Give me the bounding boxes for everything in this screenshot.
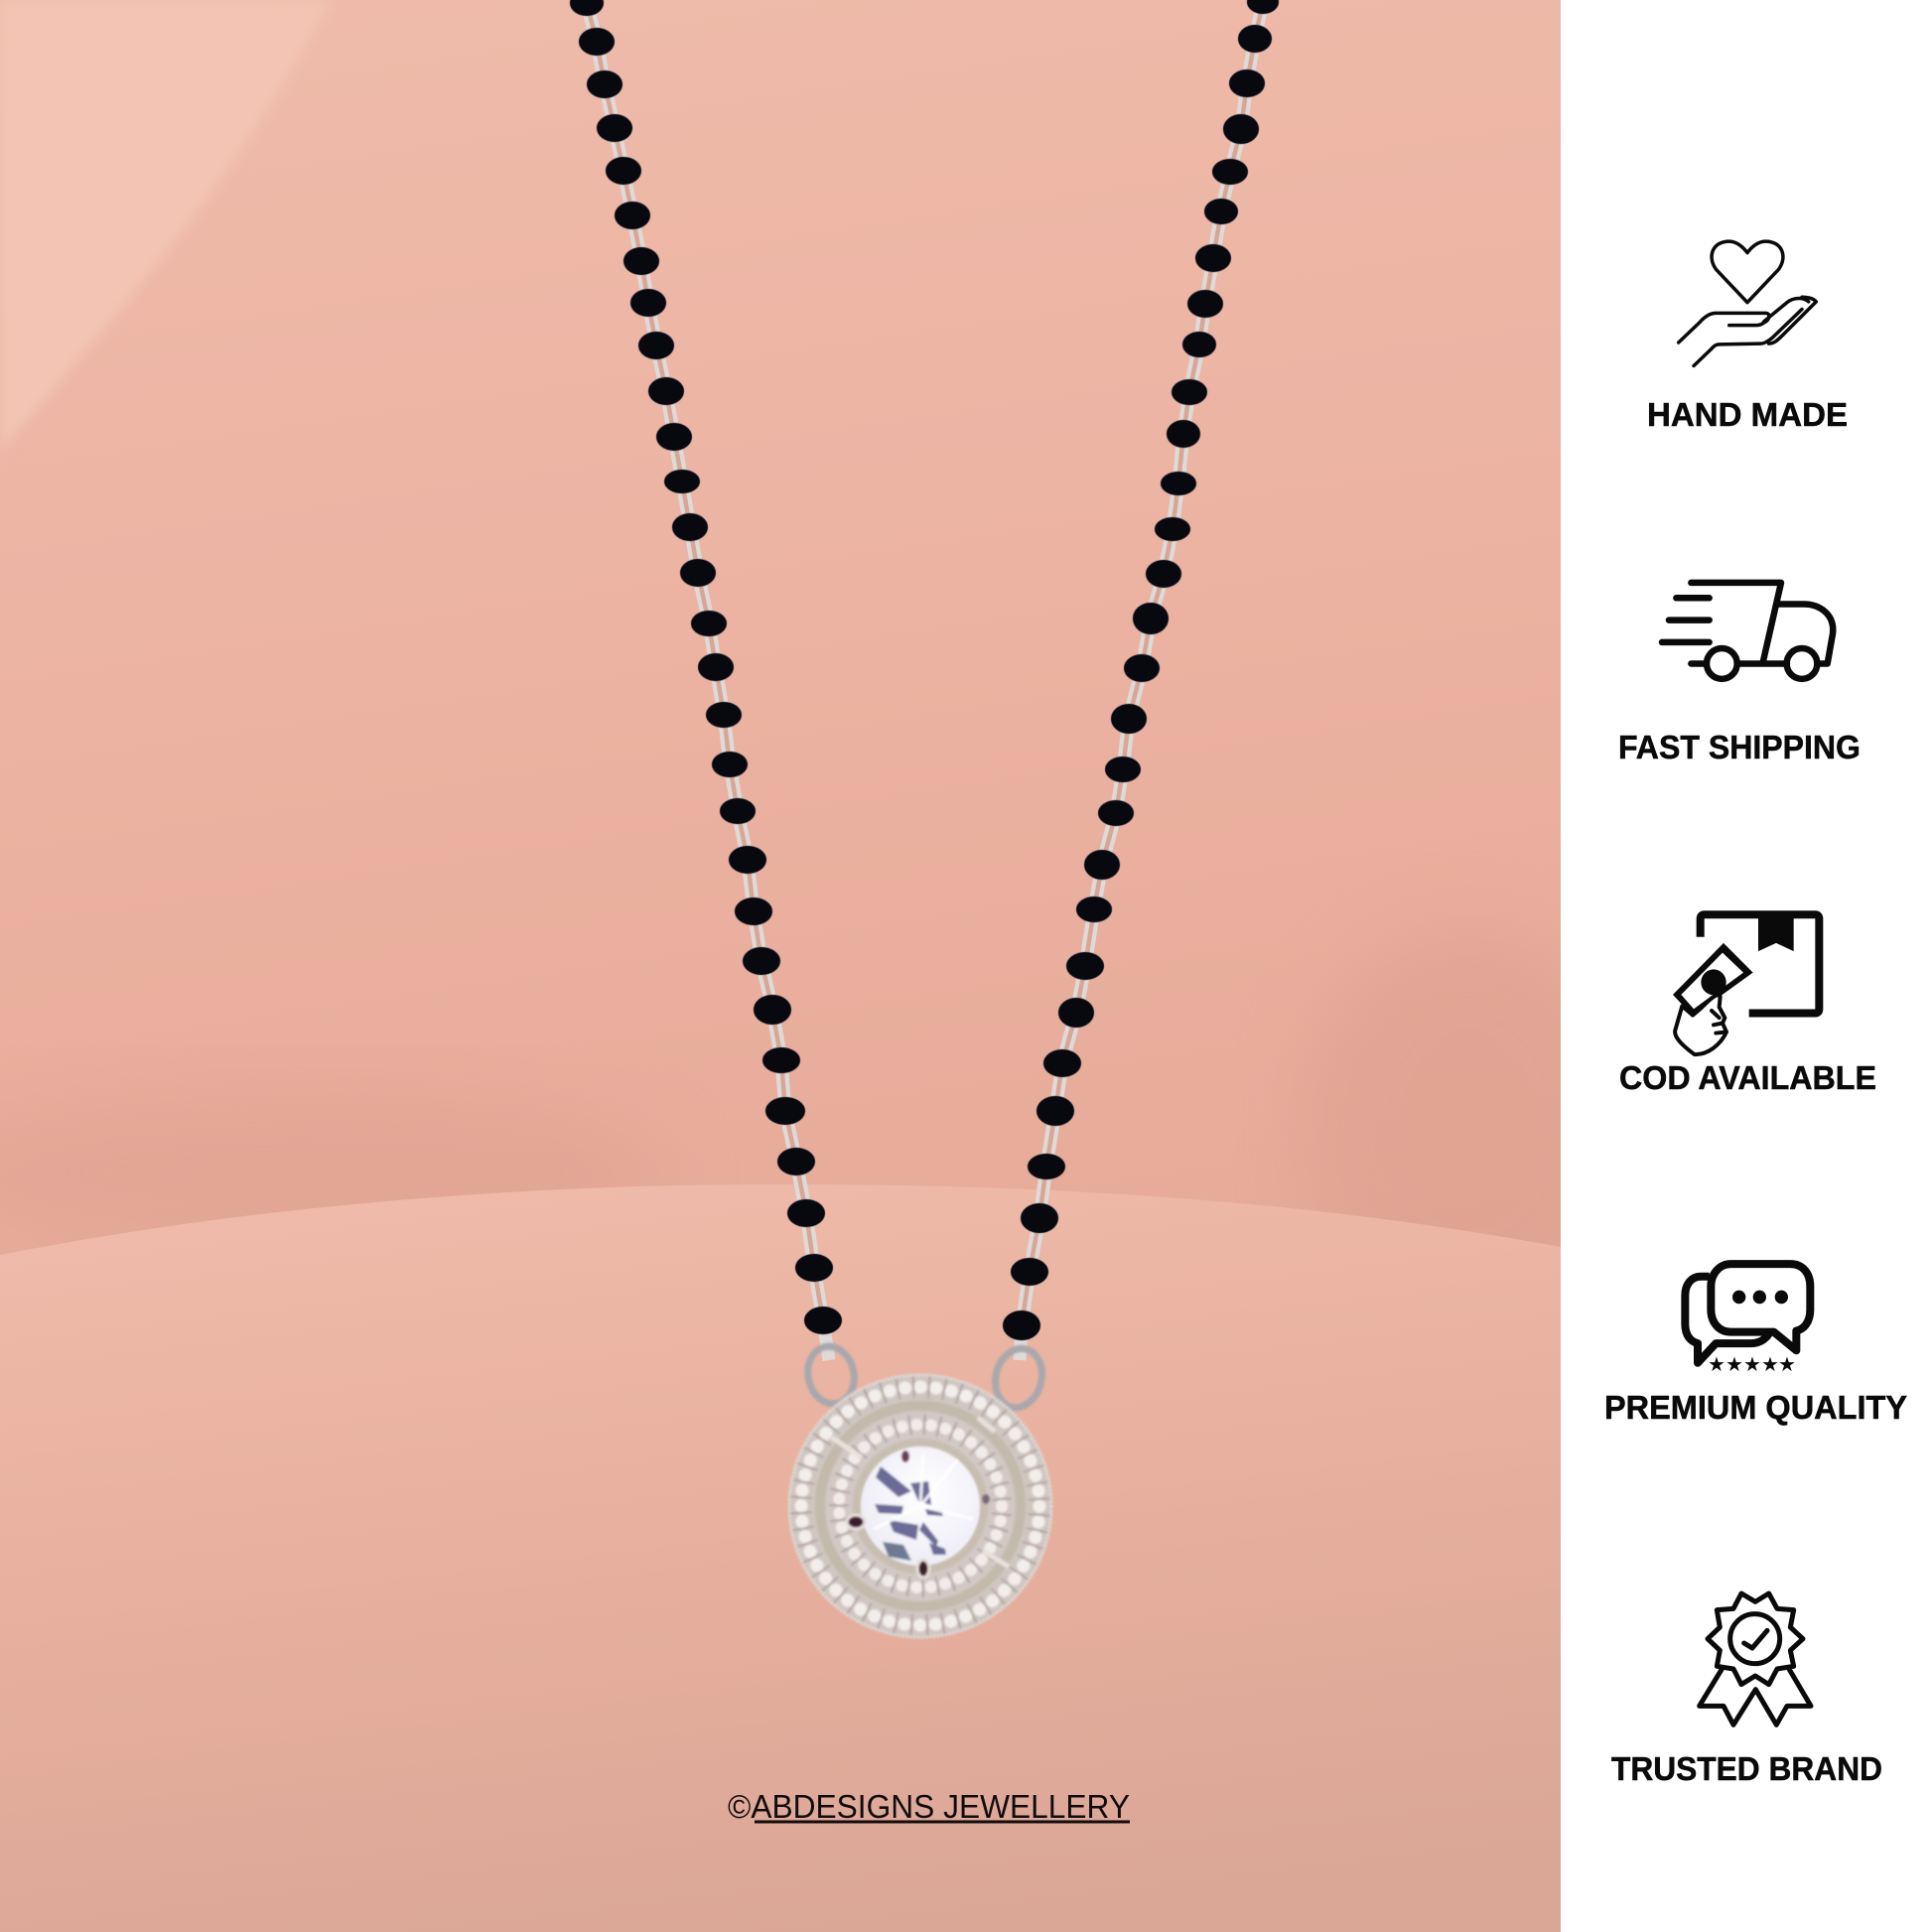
copyright credit: ©ABDESIGNS JEWELLERY bbox=[728, 1788, 1130, 1825]
outer pave ring bbox=[789, 1375, 1051, 1637]
feature: premium quality bbox=[1604, 1264, 1907, 1426]
five stars: ★ bbox=[1725, 1352, 1743, 1376]
five stars bbox=[1708, 1352, 1796, 1376]
right bale ring bbox=[989, 1343, 1048, 1413]
icon: heart in hand bbox=[1679, 241, 1816, 365]
inner channel bbox=[857, 1443, 984, 1570]
feature: fast shipping bbox=[1618, 583, 1861, 765]
centre diamond bbox=[861, 1447, 980, 1566]
right chain strand bbox=[1003, 0, 1279, 1360]
icon: award rosette with check bbox=[1700, 1593, 1811, 1725]
five stars: ★ bbox=[1743, 1352, 1761, 1376]
label: trusted brand: TRUSTED BRAND bbox=[1611, 1750, 1882, 1787]
feature: hand made bbox=[1647, 241, 1848, 433]
five stars: ★ bbox=[1778, 1352, 1796, 1376]
cross bars bbox=[832, 1418, 1009, 1567]
necklace chain with black beads bbox=[570, 0, 1279, 1360]
inner pave ring bbox=[839, 1425, 1002, 1587]
prongs bbox=[847, 1515, 929, 1578]
pendant: double halo solitaire bbox=[788, 1342, 1052, 1638]
label: hand made: HAND MADE bbox=[1647, 396, 1848, 433]
channel between rings bbox=[820, 1406, 1021, 1606]
feature: cash on delivery bbox=[1619, 914, 1876, 1096]
label: fast shipping: FAST SHIPPING bbox=[1618, 729, 1861, 765]
icon: speech bubbles with stars bbox=[1685, 1264, 1810, 1363]
left bale ring bbox=[802, 1342, 860, 1408]
panel: white feature sidebar bbox=[1561, 0, 1932, 1932]
icon: delivery truck bbox=[1662, 583, 1833, 679]
pendant disc bbox=[788, 1374, 1052, 1638]
icon: parcel with cash in hand bbox=[1673, 914, 1819, 1054]
five stars: ★ bbox=[1761, 1352, 1779, 1376]
feature: trusted brand bbox=[1611, 1593, 1882, 1787]
label: premium quality: PREMIUM QUALITY bbox=[1604, 1389, 1907, 1426]
label: cod available: COD AVAILABLE bbox=[1619, 1059, 1876, 1096]
five stars: ★ bbox=[1708, 1352, 1725, 1376]
left chain strand bbox=[570, 0, 842, 1360]
